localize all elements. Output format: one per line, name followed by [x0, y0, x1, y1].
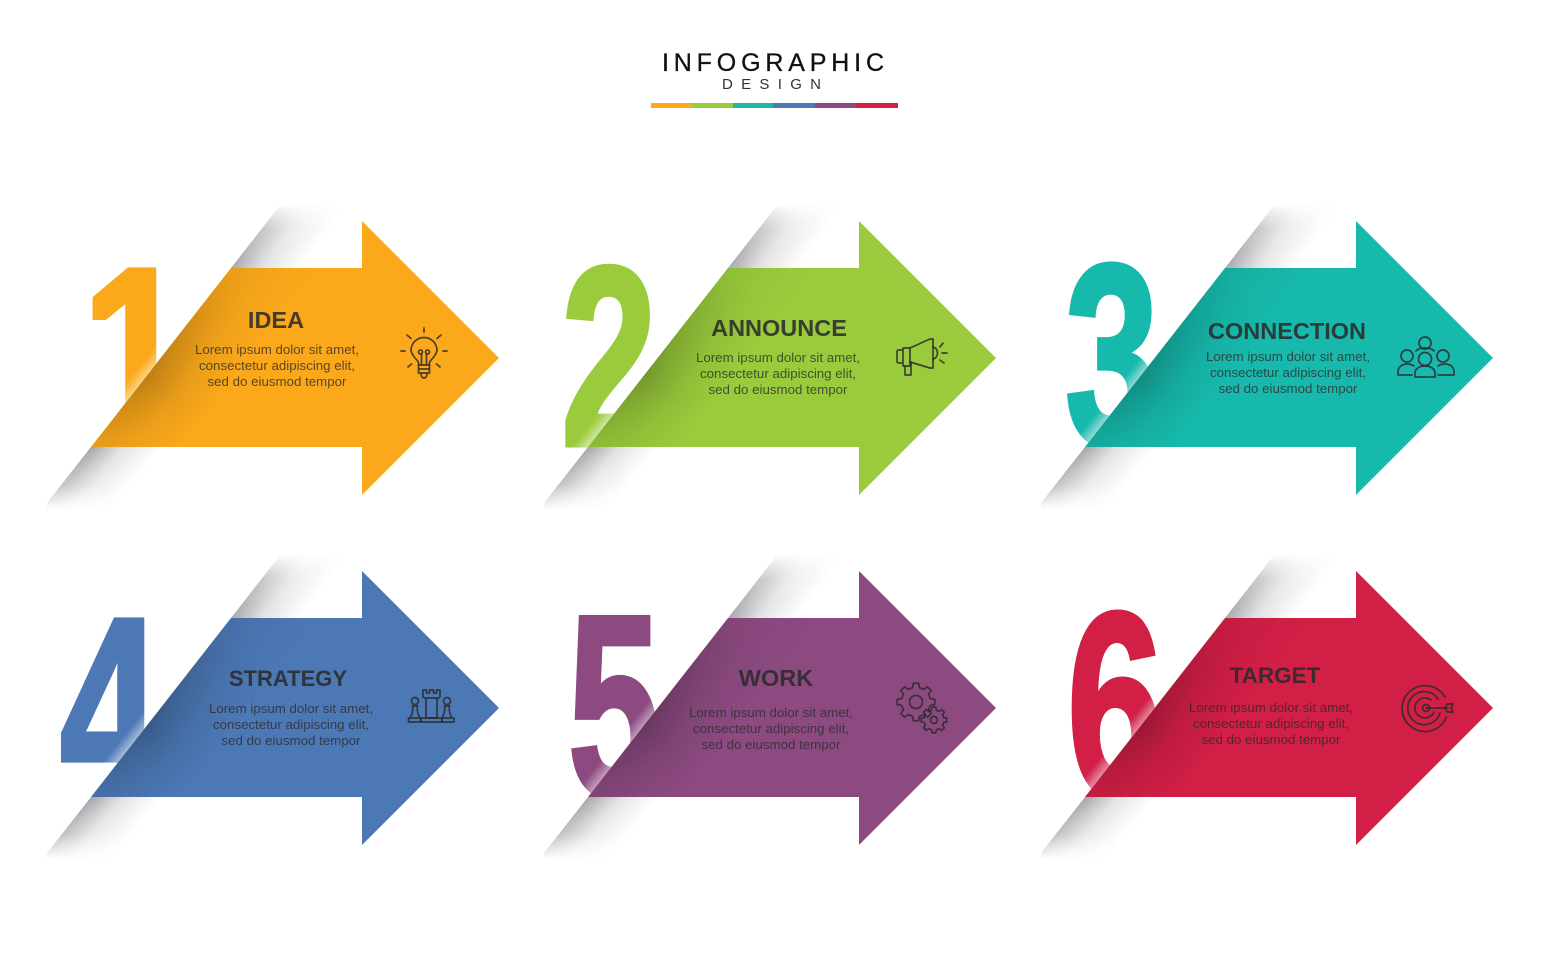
number 3: 3 [1065, 210, 1159, 499]
icon: gears [897, 683, 947, 733]
text block: Lorem ipsum dolor sit amet, [209, 701, 373, 716]
panel: step 3 connection [1041, 204, 1493, 515]
icon: light bulb [401, 328, 447, 378]
heading: WORK [739, 665, 813, 691]
number 1: 1 [81, 215, 191, 501]
text block: sed do eiusmod tempor [1202, 732, 1341, 747]
text block: sed do eiusmod tempor [709, 382, 848, 397]
arrow shape [588, 571, 996, 845]
icon: megaphone [897, 339, 947, 375]
arrow shape [91, 221, 499, 495]
text block: consectetur adipiscing elit, [1210, 365, 1366, 380]
heading: TARGET [1230, 663, 1321, 688]
text block: sed do eiusmod tempor [208, 374, 347, 389]
heading: CONNECTION [1208, 318, 1366, 344]
title: DESIGN [722, 76, 821, 93]
icon: target [1402, 686, 1453, 732]
number 4: 4 [60, 565, 160, 851]
panel: step 6 target [1041, 554, 1493, 865]
number 6: 6 [1067, 558, 1163, 851]
panel: step 4 strategy [47, 554, 499, 865]
panel: step 1 idea [47, 204, 499, 515]
arrow shape [1085, 571, 1493, 845]
text block: sed do eiusmod tempor [702, 737, 841, 752]
text block: sed do eiusmod tempor [1219, 381, 1358, 396]
text block: Lorem ipsum dolor sit amet, [689, 705, 853, 720]
arrow shape [588, 221, 996, 495]
title [662, 49, 884, 93]
icon: chess pieces [408, 690, 454, 722]
text block: Lorem ipsum dolor sit amet, [696, 350, 860, 365]
arrow shape [1085, 221, 1493, 495]
text block: consectetur adipiscing elit, [1193, 716, 1349, 731]
text block: consectetur adipiscing elit, [199, 358, 355, 373]
title: INFOGRAPHIC [662, 49, 884, 77]
arrow shape [91, 571, 499, 845]
heading: ANNOUNCE [711, 315, 847, 341]
heading: IDEA [248, 307, 304, 333]
text block: Lorem ipsum dolor sit amet, [1206, 349, 1370, 364]
number 5: 5 [568, 561, 660, 850]
text block: consectetur adipiscing elit, [693, 721, 849, 736]
text block: Lorem ipsum dolor sit amet, [1189, 700, 1353, 715]
number 2: 2 [561, 214, 657, 500]
panel: step 5 work [544, 554, 996, 865]
heading: STRATEGY [229, 666, 347, 691]
panel: step 2 announce [544, 204, 996, 515]
colour bar [651, 103, 898, 108]
text block: consectetur adipiscing elit, [213, 717, 369, 732]
text block: sed do eiusmod tempor [222, 733, 361, 748]
text block: Lorem ipsum dolor sit amet, [195, 342, 359, 357]
icon: people [1398, 337, 1454, 377]
text block: consectetur adipiscing elit, [700, 366, 856, 381]
